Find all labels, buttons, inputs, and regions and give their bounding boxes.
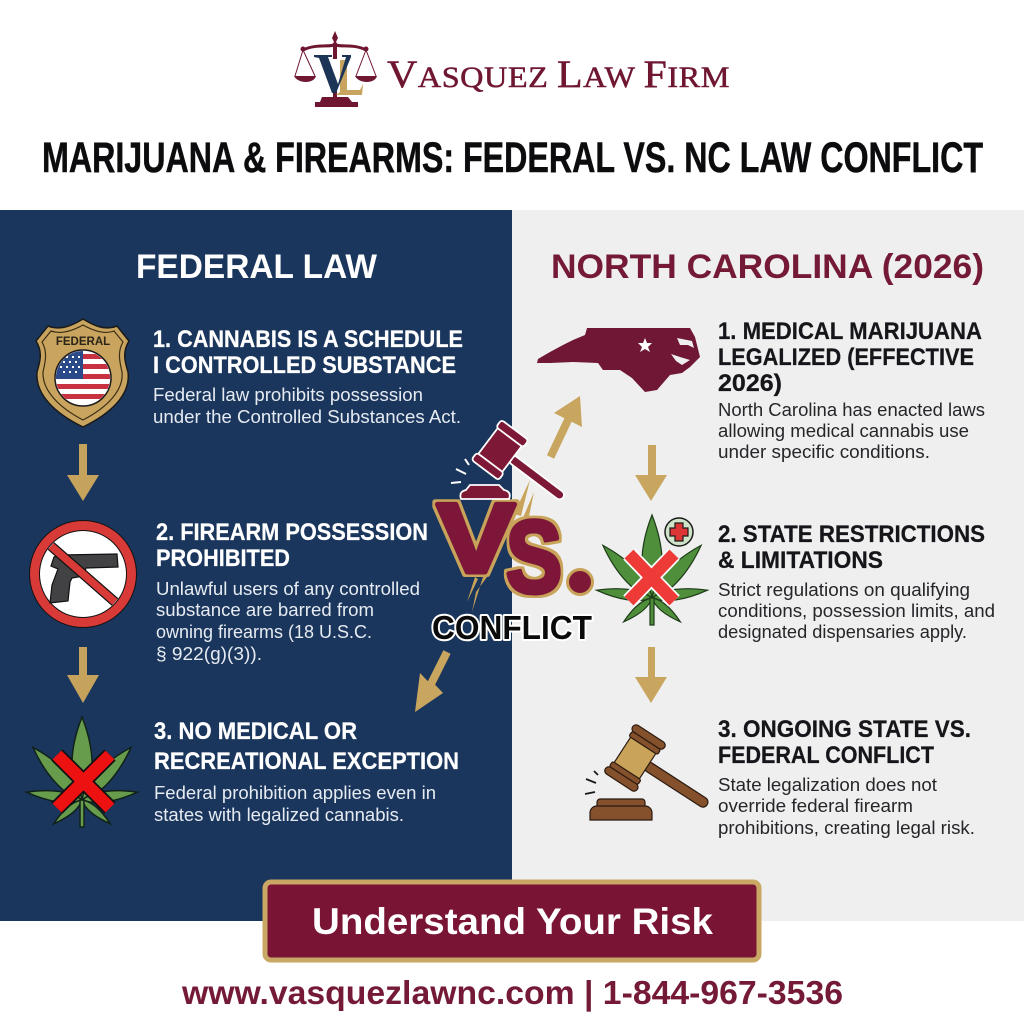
text block: NC 1: North Carolina has enacted laws xyxy=(718,400,985,420)
text block: federal 2 xyxy=(156,519,428,664)
text block: federal 1 xyxy=(153,326,463,427)
footer contact line: www.vasquezlawnc.com | 1-844-967-3536 xyxy=(181,974,843,1011)
text block: NC 2 xyxy=(718,521,995,642)
logo wordmark: VASQUEZ LAW FIRM xyxy=(387,53,730,96)
text block: NC 3: State legalization does not xyxy=(718,775,937,795)
text block: NC 1: allowing medical cannabis use xyxy=(718,421,969,441)
text block: federal 1: I CONTROLLED SUBSTANCE xyxy=(153,352,456,379)
arrow: badge to no-gun xyxy=(67,444,99,501)
panel: north carolina xyxy=(512,210,1024,921)
text block: federal 1: under the Controlled Substances Act. xyxy=(153,407,461,427)
text block: NC 3: 3. ONGOING STATE VS. xyxy=(718,716,971,743)
text block: federal 2: PROHIBITED xyxy=(156,545,290,572)
arrow: map to restrictions xyxy=(635,445,667,501)
icon: medical cross xyxy=(665,518,693,546)
arrow: no-gun to leaf xyxy=(67,647,99,703)
icon: no firearm sign xyxy=(29,520,137,628)
text block: federal 3: RECREATIONAL EXCEPTION xyxy=(154,748,459,775)
panel: federal law xyxy=(0,210,512,921)
central conflict emblem xyxy=(415,396,592,712)
logo: Vasquez Law Firm xyxy=(294,31,730,107)
text block: federal 1: Federal law prohibits possession xyxy=(153,385,423,405)
icon: restricted cannabis leaf with medical cross xyxy=(596,515,708,625)
arrow: diagonal to north carolina xyxy=(547,396,582,459)
call to action button: Understand Your Risk xyxy=(312,901,713,942)
text block: NC 1: 1. MEDICAL MARIJUANA xyxy=(718,318,982,345)
vs lettering: V xyxy=(437,483,515,593)
icon: brown gavel xyxy=(585,723,723,829)
text block: federal 2: § 922(g)(3)). xyxy=(156,644,262,664)
vs lettering: S xyxy=(506,500,562,614)
text block: NC 3: prohibitions, creating legal risk. xyxy=(718,818,975,838)
text block: NC 2: designated dispensaries apply. xyxy=(718,622,967,642)
heading: north carolina: NORTH CAROLINA (2026) xyxy=(551,248,984,286)
text block: NC 2: 2. STATE RESTRICTIONS xyxy=(718,521,985,548)
text block: federal 2: owning firearms (18 U.S.C. xyxy=(156,622,372,642)
call to action button xyxy=(265,882,759,960)
text block: NC 2: conditions, possession limits, and xyxy=(718,601,995,621)
text block: NC 2: & LIMITATIONS xyxy=(718,547,883,574)
text block: NC 3: FEDERAL CONFLICT xyxy=(718,742,934,769)
text block: NC 1 xyxy=(718,318,985,462)
text block: federal 3: Federal prohibition applies even in xyxy=(154,783,436,803)
text block: NC 1: LEGALIZED (EFFECTIVE xyxy=(718,344,974,371)
text block: federal 2: substance are barred from xyxy=(156,600,374,620)
text block: federal 2: Unlawful users of any controlled xyxy=(156,579,420,599)
text block: federal 3: 3. NO MEDICAL OR xyxy=(154,718,357,745)
arrow: restrictions to gavel xyxy=(635,647,667,703)
arrow: diagonal to federal xyxy=(415,650,451,712)
text block: NC 1: under specific conditions. xyxy=(718,442,930,462)
text block: federal 3: states with legalized cannabis. xyxy=(154,805,404,825)
text block: federal 3 xyxy=(154,718,459,825)
text block: NC 3 xyxy=(718,716,975,838)
text block: federal 2: 2. FIREARM POSSESSION xyxy=(156,519,428,546)
vs lettering xyxy=(437,483,562,614)
icon: federal badge: FEDERAL xyxy=(56,336,110,348)
icon: scales of justice monogram xyxy=(294,31,377,107)
text block: NC 1: 2026) xyxy=(718,370,782,397)
text block: federal 1: 1. CANNABIS IS A SCHEDULE xyxy=(153,326,463,353)
text block: NC 2: Strict regulations on qualifying xyxy=(718,580,970,600)
icon: north carolina map xyxy=(537,328,700,392)
icon: maroon gavel xyxy=(451,420,578,518)
text block: NC 3: override federal firearm xyxy=(718,796,913,816)
heading: federal law: FEDERAL LAW xyxy=(136,248,378,286)
vs period xyxy=(568,570,592,594)
lightning accents xyxy=(467,480,534,612)
icon: cannabis leaf crossed out xyxy=(26,717,138,827)
icon: federal badge xyxy=(36,319,129,427)
conflict label: CONFLICT xyxy=(432,609,592,646)
